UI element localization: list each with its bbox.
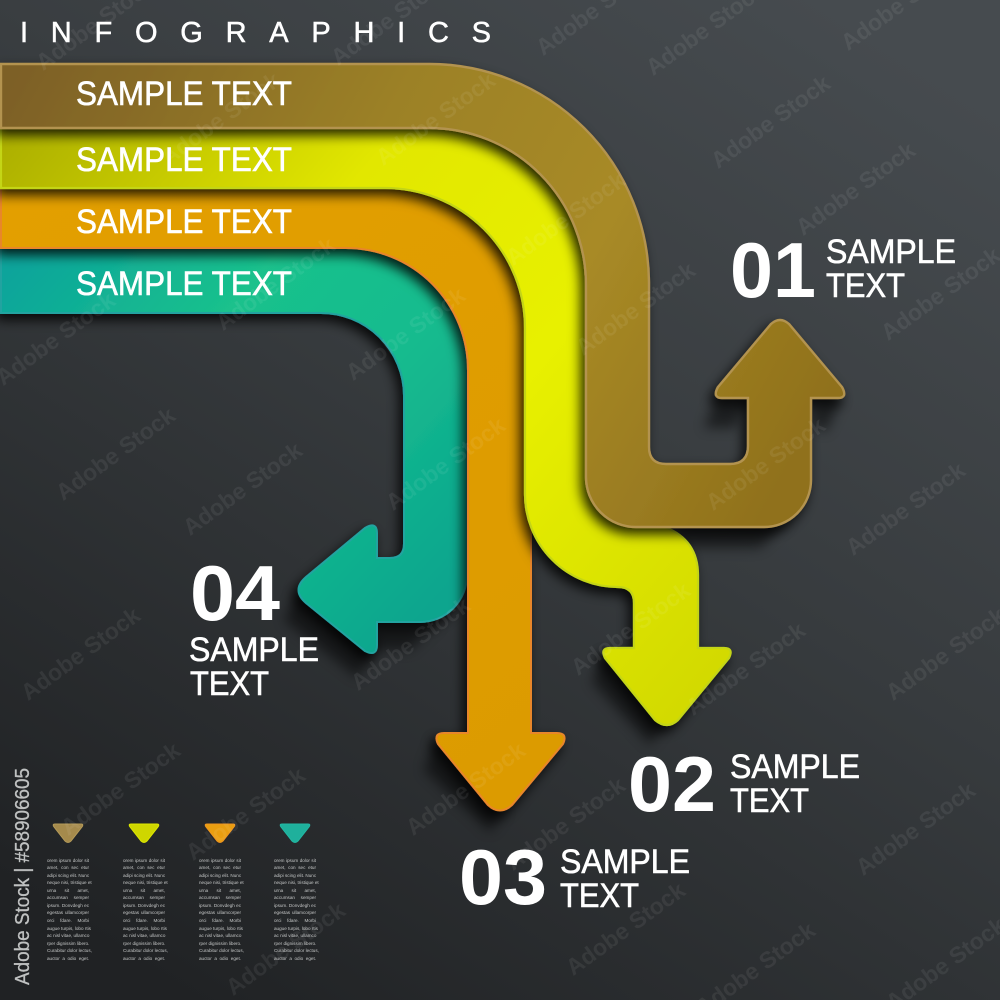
callout 04: SAMPLE (189, 631, 319, 669)
band label 1: SAMPLE TEXT (76, 75, 292, 113)
callout 01: SAMPLE (826, 233, 956, 271)
callout 04 (189, 549, 319, 703)
legend text column 3: orem ipsum dolor sit (199, 858, 241, 862)
legend triangle brown (53, 824, 83, 842)
watermark text: Adobe Stock (51, 402, 180, 505)
legend text column 3: orci fdare. Morbi (199, 918, 241, 923)
watermark text: Adobe Stock (156, 67, 285, 170)
callout 02: 02 (628, 740, 716, 828)
watermark text: Adobe Stock (851, 777, 980, 880)
watermark text: Adobe Stock (571, 257, 700, 360)
legend text column 2: ac nisl vitae, ullamco (123, 933, 165, 938)
legend text column 2: neque nisi, tristique et (123, 880, 168, 885)
legend text column 2: adipi scing elit. Nunc (123, 873, 165, 878)
legend text column 1 (47, 858, 92, 961)
watermark text: Adobe Stock (211, 232, 340, 335)
legend text column 2: amet, con sec etur (123, 865, 165, 870)
legend text column 1: orci fdare. Morbi (47, 918, 89, 923)
callout 03 (459, 833, 690, 921)
legend text column 1: urna sit amet, (47, 888, 89, 893)
title: INFOGRAPHICS (20, 17, 491, 49)
legend triangle yellow (129, 824, 159, 842)
watermark text: Adobe Stock (401, 737, 530, 840)
legend text column 2: rper dignissim libero. (123, 941, 165, 946)
band labels (76, 75, 292, 303)
legend triangle teal (280, 824, 310, 842)
legend text column 2: urna sit amet, (123, 888, 165, 893)
legend text column 3: Curabitur dolor lectus, (199, 948, 244, 953)
legend text column 4: urna sit amet, (274, 888, 316, 893)
band label 3: SAMPLE TEXT (76, 203, 292, 241)
callout 02: SAMPLE (730, 748, 860, 786)
watermark text: Adobe Stock (501, 772, 630, 875)
legend text column 1: adipi scing elit. Nunc (47, 873, 89, 878)
stock id side text: Adobe Stock | #58906605 (12, 768, 34, 985)
legend text column 2: orci fdare. Morbi (123, 918, 165, 923)
watermark text: Adobe Stock (841, 457, 970, 560)
watermark text: Adobe Stock (181, 762, 310, 865)
legend text column 3: ac nisl vitae, ullamco (199, 933, 241, 938)
legend text column 4: Curabitur dolor lectus, (274, 948, 319, 953)
watermark text: Adobe Stock (381, 412, 510, 515)
watermark text: Adobe Stock (371, 67, 500, 170)
long arrow shadows (284, 398, 842, 832)
legend text column 4: augue turpis, lobo rtis (274, 926, 318, 931)
legend text column 2: augue turpis, lobo rtis (123, 926, 167, 931)
legend text column 4: amet, con sec etur (274, 865, 316, 870)
watermark text: Adobe Stock (681, 617, 810, 720)
legend triangle orange (205, 824, 235, 842)
watermark text: Adobe Stock (706, 70, 835, 173)
callout 02: TEXT (730, 782, 809, 820)
legend text column 4: neque nisi, tristique et (274, 880, 319, 885)
legend text column 4: orem ipsum dolor sit (274, 858, 316, 862)
legend text column 3: egestas ullamcorper (199, 910, 241, 915)
callout 01 (730, 226, 956, 314)
watermark text: Adobe Stock (561, 877, 690, 980)
legend text column 4 (274, 858, 319, 961)
legend text column 4: auctor a odio eget. (274, 956, 316, 961)
legend text column 1: ipsum. Donvdegh ec (47, 903, 89, 908)
legend text column 1: ac nisl vitae, ullamco (47, 933, 89, 938)
legend text column 3: neque nisi, tristique et (199, 880, 244, 885)
legend text column 1: egestas ullamcorper (47, 910, 89, 915)
legend text column 4: accumsan semper (274, 895, 316, 900)
legend text column 2: Curabitur dolor lectus, (123, 948, 168, 953)
legend text column 3: urna sit amet, (199, 888, 241, 893)
legend text column 1: rper dignissim libero. (47, 941, 89, 946)
legend text column 1: Curabitur dolor lectus, (47, 948, 92, 953)
callout 03: TEXT (560, 877, 639, 915)
watermark text: Adobe Stock (346, 592, 475, 695)
legend text column 2: auctor a odio eget. (123, 956, 165, 961)
legend text column 3: accumsan semper (199, 895, 241, 900)
legend text column 2: accumsan semper (123, 895, 165, 900)
legend text column 3: auctor a odio eget. (199, 956, 241, 961)
callout 02 (628, 740, 860, 828)
legend text column 4: ipsum. Donvdegh ec (274, 903, 316, 908)
legend text column 1: auctor a odio eget. (47, 956, 89, 961)
legend text column 3: amet, con sec etur (199, 865, 241, 870)
legend text column 4: ac nisl vitae, ullamco (274, 933, 316, 938)
band label 4: SAMPLE TEXT (76, 265, 292, 303)
watermark text: Adobe Stock (16, 602, 145, 705)
band label 2: SAMPLE TEXT (76, 141, 292, 179)
callout 04: 04 (190, 549, 280, 637)
callout 01: TEXT (826, 267, 905, 305)
legend text column 4: egestas ullamcorper (274, 910, 316, 915)
legend text column 2: ipsum. Donvdegh ec (123, 903, 165, 908)
callout 03: SAMPLE (560, 843, 690, 881)
legend text column 3 (199, 858, 244, 961)
legend text column 3: ipsum. Donvdegh ec (199, 903, 241, 908)
callout 04: TEXT (190, 665, 269, 703)
legend text column 3: augue turpis, lobo rtis (199, 926, 243, 931)
legend text column 1: orem ipsum dolor sit (47, 858, 89, 862)
callout 01: 01 (730, 226, 816, 314)
watermark text: Adobe Stock (501, 167, 630, 270)
legend text column 2: orem ipsum dolor sit (123, 858, 165, 862)
yellow arrow band 02 (1, 128, 731, 725)
legend text column 1: augue turpis, lobo rtis (47, 926, 91, 931)
watermark text: Adobe Stock (791, 137, 920, 240)
legend text column 4: rper dignissim libero. (274, 941, 316, 946)
legend text column 1: amet, con sec etur (47, 865, 89, 870)
legend text column 3: adipi scing elit. Nunc (199, 873, 241, 878)
legend text column 2 (123, 858, 168, 961)
callout 03: 03 (459, 833, 547, 921)
watermark text: Adobe Stock (566, 577, 695, 680)
legend text column 1: accumsan semper (47, 895, 89, 900)
brown arrow band 01 (1, 64, 844, 527)
orange arrow band 03 (1, 188, 565, 810)
watermark text: Adobe Stock (701, 412, 830, 515)
watermark text: Adobe Stock (56, 737, 185, 840)
legend text column 2: egestas ullamcorper (123, 910, 165, 915)
legend text column 4: orci fdare. Morbi (274, 918, 316, 923)
watermark text: Adobe Stock (178, 437, 307, 540)
teal arrow band 04 (1, 248, 467, 653)
legend text column 3: rper dignissim libero. (199, 941, 241, 946)
watermark text: Adobe Stock (341, 282, 470, 385)
watermark text: Adobe Stock (221, 897, 350, 1000)
legend text column 1: neque nisi, tristique et (47, 880, 92, 885)
legend text column 4: adipi scing elit. Nunc (274, 873, 316, 878)
